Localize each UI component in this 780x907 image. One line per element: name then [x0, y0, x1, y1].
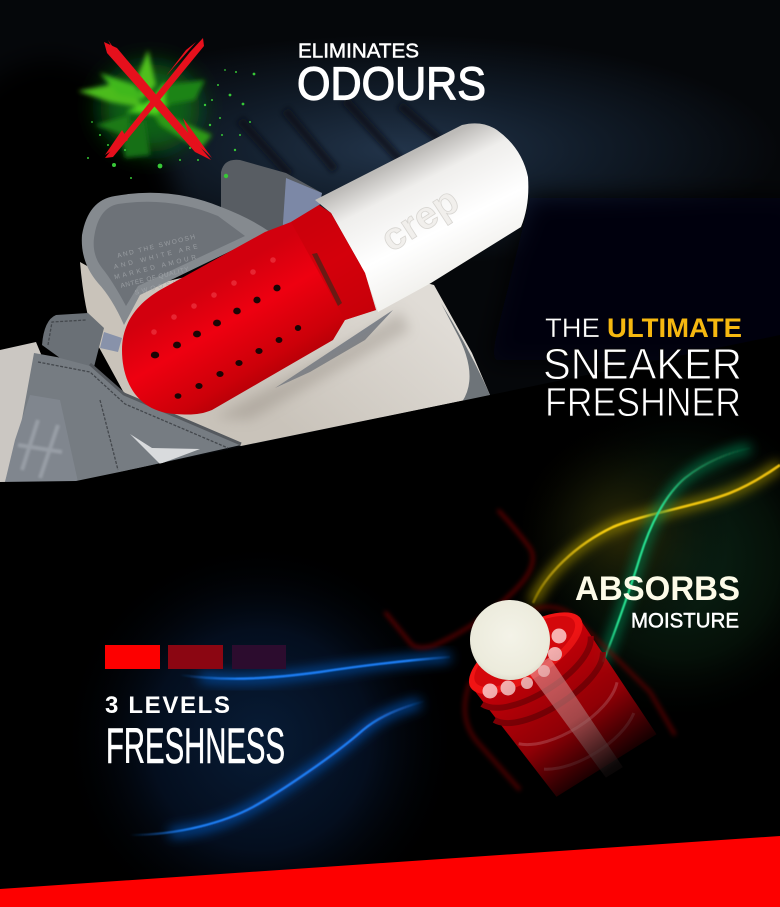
absorbs heading: ABSORBS	[575, 570, 740, 608]
tube white reflection	[527, 655, 623, 783]
capsule body highlight	[291, 205, 376, 320]
upper stitching	[38, 320, 228, 470]
tube body	[470, 615, 657, 804]
tongue mesh	[282, 178, 322, 238]
3 levels label: 3 LEVELS	[105, 692, 230, 719]
freshener tube	[468, 612, 656, 796]
lace strokes	[18, 420, 62, 478]
lace knot mesh	[100, 332, 122, 352]
freshner heading: FRESHNER	[545, 379, 741, 425]
sneaker photo	[0, 160, 490, 482]
tube rim holes	[482, 628, 566, 698]
collar text	[109, 233, 206, 301]
embossed logo: crep	[373, 180, 467, 260]
collar text: AND WHITE ARE	[113, 243, 199, 271]
capsule freshener	[122, 123, 528, 420]
freshness level bars	[105, 645, 286, 669]
tube inner rim	[474, 616, 575, 687]
collar text: AND THE SWOOSH	[117, 234, 196, 260]
red cross	[104, 38, 212, 160]
lower black section	[0, 335, 780, 907]
capsule vent slot	[312, 253, 342, 306]
white capsule cap	[315, 123, 528, 312]
grey side panel	[441, 303, 490, 402]
soft shadow under capsule	[215, 312, 410, 420]
capsule air holes	[151, 285, 301, 399]
moisture heading: MOISTURE	[631, 610, 739, 632]
red bottom band	[0, 836, 780, 907]
shoe collar	[82, 193, 270, 325]
green speckles	[87, 69, 255, 179]
ultimate highlight: ULTIMATE	[607, 313, 742, 343]
yellow light streak	[533, 465, 780, 603]
white leather panel	[80, 250, 490, 446]
the ultimate heading	[545, 313, 742, 343]
green light streak	[603, 448, 750, 662]
grey shoe upper	[5, 353, 241, 482]
collar text: SWOOSH	[134, 279, 179, 297]
shoe tongue	[221, 160, 322, 238]
grey mesh under capsule	[275, 310, 393, 388]
level 2 bar	[168, 645, 223, 669]
eliminates heading: ELIMINATES	[298, 40, 419, 62]
sneaker heading: SNEAKER	[543, 340, 742, 389]
freshness label: FRESHNESS	[106, 718, 285, 774]
faint top holes	[151, 257, 276, 335]
collar text: MARKED AMOUR	[114, 254, 197, 281]
red glow outline	[385, 510, 675, 790]
red capsule body	[122, 205, 376, 415]
top background with blurred sole	[0, 0, 780, 540]
tube top ring	[468, 612, 582, 694]
collar text: ANTEE OF QUALITY	[120, 266, 190, 290]
lower ambient glows	[60, 395, 780, 907]
level 1 bar	[105, 645, 160, 669]
swoosh	[130, 434, 200, 464]
green odour burst	[78, 50, 255, 179]
tube ridges	[480, 636, 606, 726]
laces	[5, 395, 78, 482]
the ultimate heading: THE	[545, 313, 600, 343]
odours heading: ODOURS	[297, 58, 486, 110]
heel strap	[42, 313, 104, 367]
eliminates heading	[297, 40, 486, 110]
panel edge	[90, 364, 241, 444]
blue light streaks	[130, 657, 450, 835]
level 3 bar	[232, 645, 286, 669]
white moisture ball	[470, 600, 550, 680]
collar inner lining	[94, 202, 245, 306]
toe box	[0, 342, 60, 482]
